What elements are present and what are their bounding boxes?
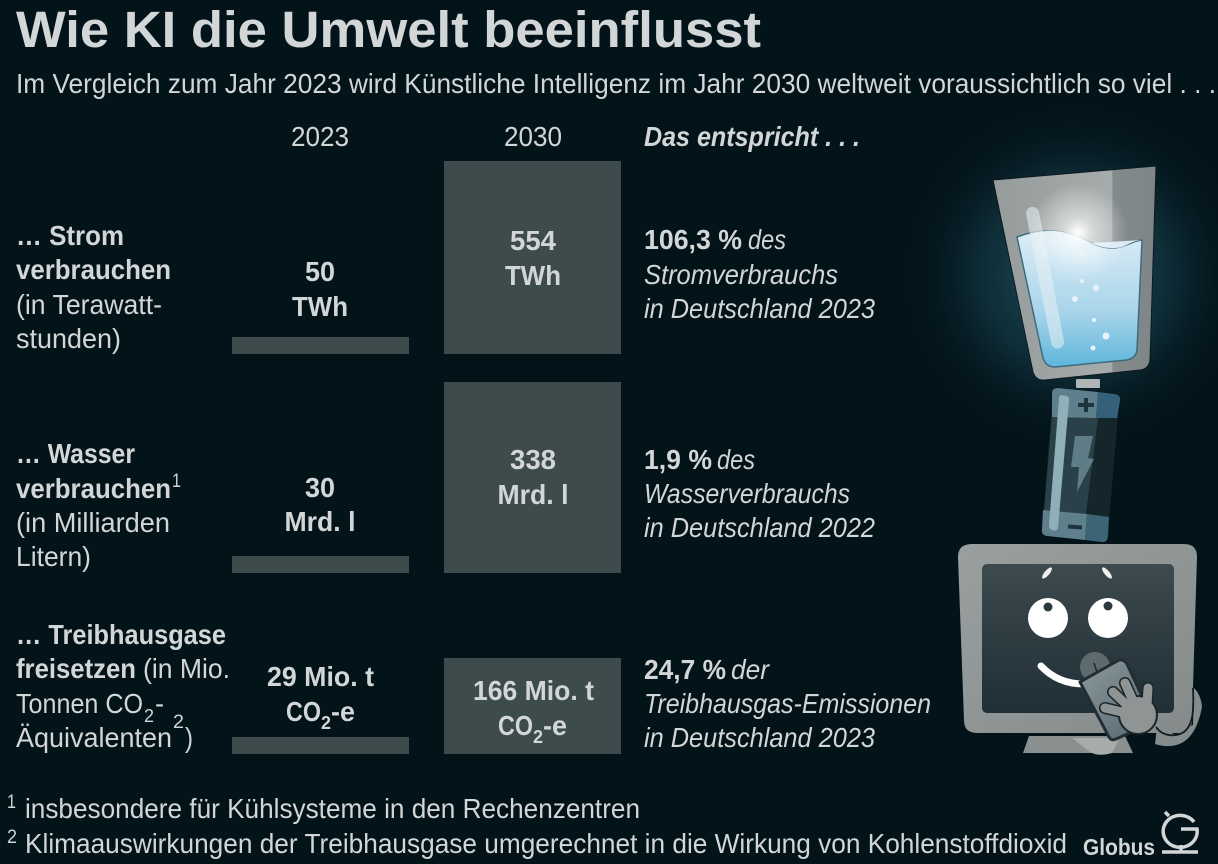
bar: Treibhausgase 2030 <box>444 658 621 754</box>
row label: Treibhausgase: - <box>155 688 164 719</box>
row label: Treibhausgase: Äquivalenten <box>16 722 172 753</box>
bar: Treibhausgase 2030: -e <box>543 710 567 741</box>
column headers: Das entspricht . . . <box>644 121 860 152</box>
column headers: 2030 <box>504 121 562 152</box>
comparison: Strom: Stromverbrauchs <box>644 259 838 290</box>
row label: Strom: stunden) <box>16 323 121 354</box>
comparison: Wasser: in Deutschland 2022 <box>644 512 875 543</box>
comparison: Wasser: des <box>717 444 755 475</box>
comparison: Wasser: 1,9 % <box>644 444 712 475</box>
comparison: Treibhausgase <box>644 654 931 753</box>
row label: Strom: … Strom <box>16 220 124 251</box>
bar: Wasser 2030: 338 <box>510 444 556 475</box>
icon: glass of water <box>993 166 1156 380</box>
bar: Strom 2023: TWh <box>292 291 348 322</box>
icon: monitor with face <box>958 544 1202 755</box>
logo: Globus: Globus <box>1083 834 1155 860</box>
bar: Strom 2023: 50 <box>305 256 335 287</box>
footnote 1: 1 <box>7 792 16 813</box>
title: Wie KI die Umwelt beeinflusst <box>16 1 761 58</box>
bar: Treibhausgase 2023 <box>232 661 409 754</box>
comparison: Treibhausgase: Treibhausgas-Emissionen <box>644 688 931 719</box>
row label: Treibhausgase: freisetzen <box>16 653 136 684</box>
footnote 2: Klimaauswirkungen der Treibhausgase umgerechnet in die Wirkung von Kohlenstoffdioxid <box>25 828 1067 859</box>
bar: Strom 2030: TWh <box>505 260 561 291</box>
bar: Wasser 2023: 30 <box>305 472 335 503</box>
row label: Wasser: (in Milliarden <box>16 507 170 538</box>
bar: Treibhausgase 2023: -e <box>331 696 355 727</box>
column headers <box>291 121 860 152</box>
bar: Treibhausgase 2023: 2 <box>321 713 331 733</box>
comparison: Strom: in Deutschland 2023 <box>644 293 875 324</box>
comparison: Strom <box>644 224 875 324</box>
row label: Wasser <box>16 438 181 572</box>
row label: Treibhausgase: … Treibhausgase <box>16 619 226 650</box>
comparison: Treibhausgase: der <box>731 654 771 685</box>
comparison: Strom: 106,3 % <box>644 224 742 255</box>
bar: Strom 2023 <box>232 256 409 354</box>
icon: battery <box>1042 379 1120 542</box>
bar: Treibhausgase 2030: 2 <box>533 727 543 747</box>
row label: Strom: verbrauchen <box>16 254 171 285</box>
bar: Wasser 2030 <box>444 382 621 573</box>
row label: Treibhausgase: ) <box>185 722 193 753</box>
bar: Wasser 2023 <box>232 472 409 573</box>
logo: Globus <box>1083 812 1198 860</box>
row label: Treibhausgase: 2 <box>144 706 154 726</box>
row label: Treibhausgase: 2 <box>173 712 184 733</box>
row label: Strom <box>16 220 171 354</box>
bar: Wasser 2023: Mrd. l <box>284 506 356 537</box>
row label: Treibhausgase: Tonnen CO <box>16 688 143 719</box>
bar: Treibhausgase 2023: CO <box>286 696 321 727</box>
column headers: 2023 <box>291 121 349 152</box>
bar: Strom 2030: 554 <box>510 225 556 256</box>
comparison: Wasser <box>644 444 875 543</box>
row label: Wasser: verbrauchen <box>16 473 171 504</box>
bar: Treibhausgase 2030: CO <box>498 710 533 741</box>
footnote 1: insbesondere für Kühlsysteme in den Rechenzentren <box>25 793 640 824</box>
row label: Wasser: 1 <box>172 471 181 492</box>
comparison: Wasser: Wasserverbrauchs <box>644 478 850 509</box>
footnote 2: 2 <box>7 827 17 848</box>
row label: Strom: (in Terawatt- <box>16 289 162 320</box>
bar: Treibhausgase 2030: 166 Mio. t <box>473 675 594 706</box>
bar: Strom 2030 <box>444 161 621 354</box>
comparison: Treibhausgase: in Deutschland 2023 <box>644 722 875 753</box>
bar: Treibhausgase 2023: 29 Mio. t <box>267 661 374 692</box>
row label: Wasser: … Wasser <box>16 438 135 469</box>
comparison: Treibhausgase: 24,7 % <box>644 654 726 685</box>
bar: Wasser 2030: Mrd. l <box>498 479 568 510</box>
comparison: Strom: des <box>748 224 786 255</box>
row label: Wasser: Litern) <box>16 541 91 572</box>
row label: Treibhausgase: (in Mio. <box>143 653 230 684</box>
row label: Treibhausgase <box>16 619 230 753</box>
